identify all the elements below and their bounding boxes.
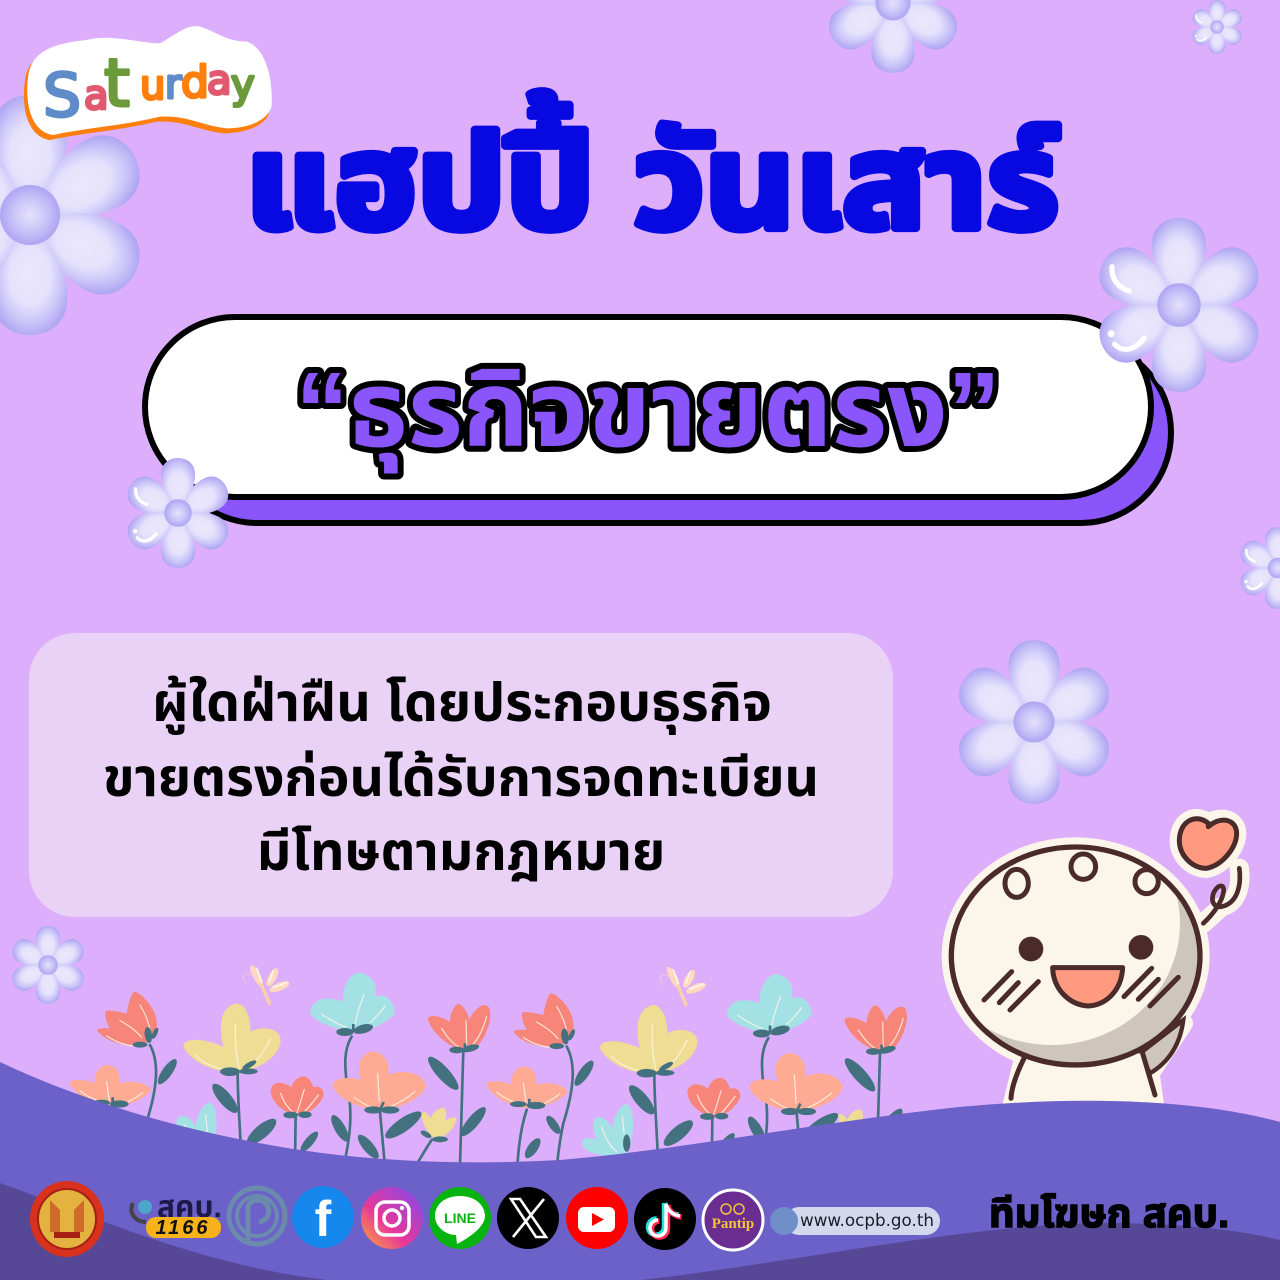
- banner: [145, 317, 1171, 523]
- Saturday badge: Sat urday: [43, 45, 255, 131]
- decorative flower: banner right: [1090, 218, 1268, 392]
- mascot: [923, 802, 1240, 1110]
- logo: hotline 1166: สคบ.: [157, 1191, 222, 1224]
- icon: Pantip: Pantip: [712, 1216, 754, 1232]
- icon: Instagram: [361, 1187, 423, 1249]
- title: แฮปปี้ วันเสาร์: [245, 91, 1059, 256]
- mascot heart: [1179, 819, 1240, 923]
- logo: hotline 1166: 1166: [155, 1217, 211, 1239]
- icon: Pantip: [703, 1190, 763, 1250]
- decorative flower: top right small: [1189, 0, 1245, 54]
- decorative flower: lower left: [8, 926, 88, 1004]
- icon: YouTube: [566, 1187, 628, 1249]
- icon: Facebook: f: [315, 1191, 332, 1247]
- decorative flower: beside text panel: [950, 640, 1118, 804]
- decorative flower: top centre: [822, 0, 964, 73]
- footer wave: dark: [0, 1183, 1280, 1280]
- decorative flower: banner left: [122, 458, 234, 568]
- icon: Facebook: [292, 1186, 354, 1248]
- footer credit: ทีมโฆษก สคบ.: [989, 1192, 1229, 1236]
- icon: X: [497, 1187, 559, 1249]
- body text lines: มีโทษตามกฎหมาย: [257, 823, 665, 882]
- logo: agency seal: [30, 1181, 104, 1257]
- footer wave: front: [0, 1062, 1280, 1280]
- decorative flower: right edge: [1236, 527, 1280, 609]
- body text lines: ผู้ใดฝ่าฝืน โดยประกอบธุรกิจ: [152, 674, 772, 735]
- website pill: [770, 1207, 940, 1235]
- panel: body text: [29, 633, 893, 917]
- website pill: www.ocpb.go.th: [800, 1211, 934, 1230]
- icon: PC logo: [229, 1188, 285, 1244]
- icon: TikTok: [634, 1188, 696, 1250]
- decorative flower: large left: [0, 95, 153, 335]
- banner heading: “ธุรกิจขายตรง”: [295, 351, 1001, 474]
- body text lines: [103, 674, 819, 882]
- icon: LINE: LINE: [444, 1210, 476, 1226]
- Saturday badge: [24, 26, 272, 140]
- icon: LINE: [429, 1187, 491, 1249]
- body text lines: ขายตรงก่อนได้รับการจดทะเบียน: [103, 749, 819, 808]
- flower meadow illustration: [69, 964, 907, 1168]
- logo: hotline 1166: [131, 1191, 222, 1239]
